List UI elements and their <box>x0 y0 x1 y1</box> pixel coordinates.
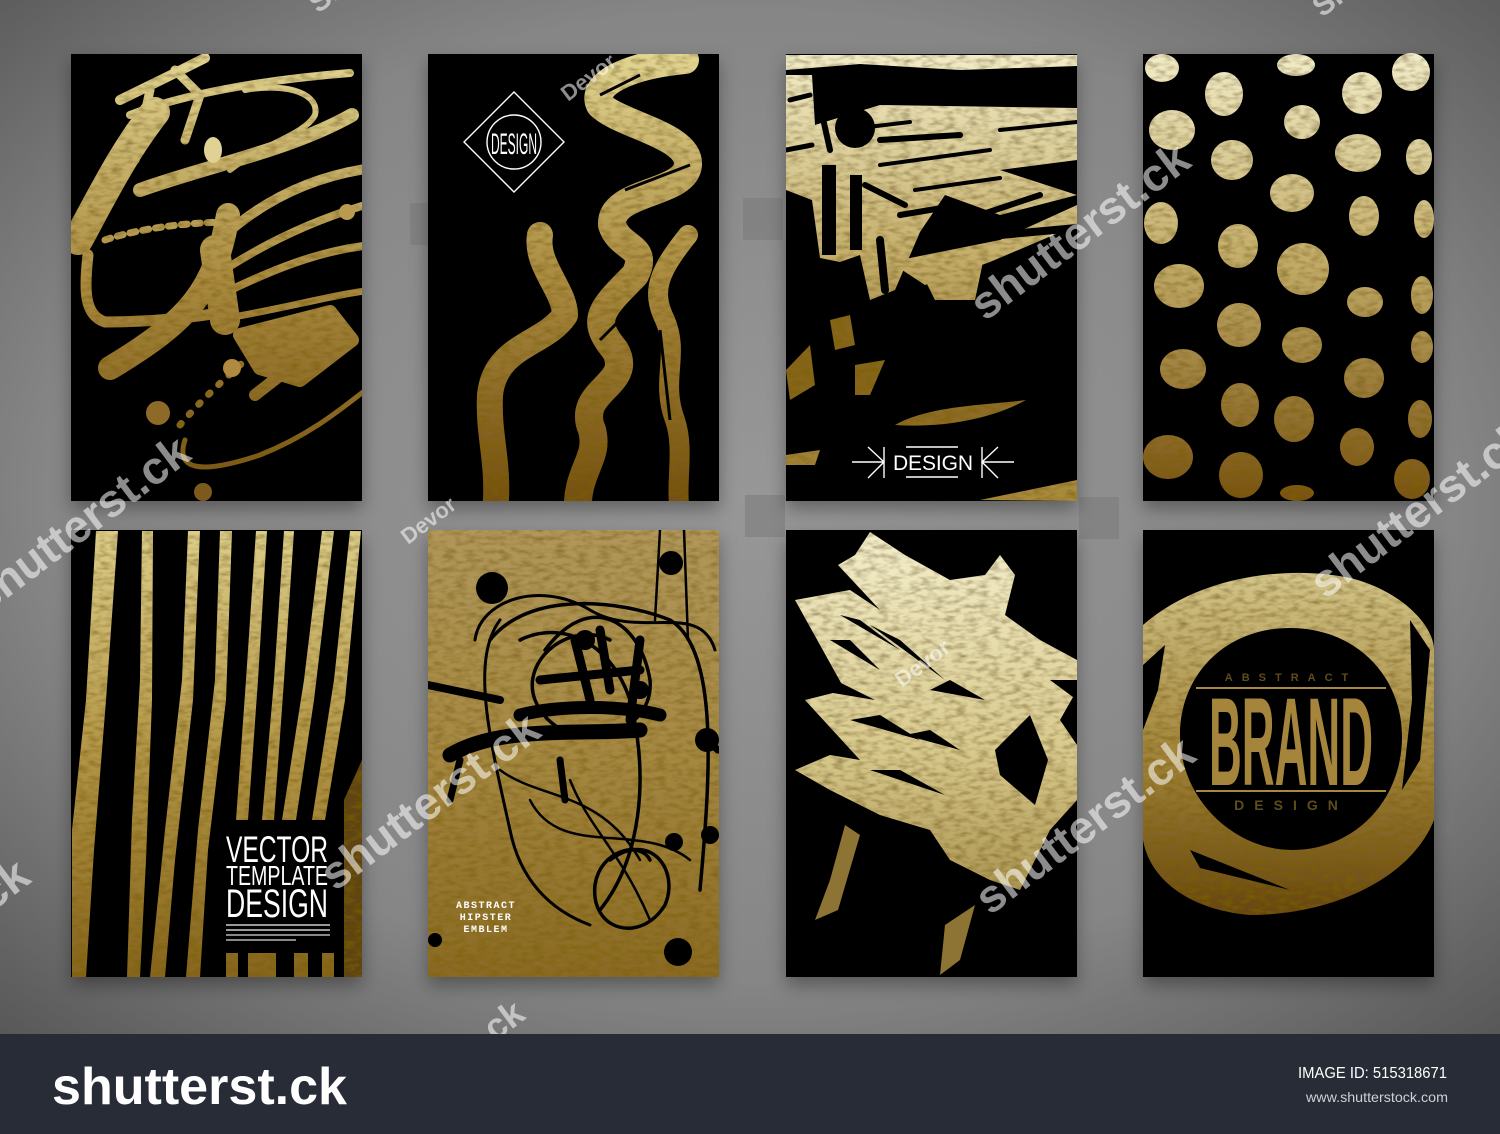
icon: design diamond emblem: DESIGN <box>491 128 537 161</box>
panel: card 6 gold with black scribble <box>428 530 719 977</box>
text block: vector template design <box>216 820 344 953</box>
watermarks: ck <box>475 991 533 1048</box>
watermarks: shutterst.ck <box>965 725 1205 924</box>
brand logotype: ABSTRACT <box>1225 672 1357 684</box>
watermarks: Devor <box>396 491 461 549</box>
ring gaps <box>1143 620 1430 890</box>
gold stripes <box>72 531 362 977</box>
text block: vector template design: TEMPLATE <box>226 860 328 891</box>
gold dot pattern <box>1143 53 1434 501</box>
design label <box>852 447 1014 478</box>
text block: vector template design: VECTOR <box>226 829 328 870</box>
panel: card 7 pale gold brush <box>786 530 1077 977</box>
panel: card 5 vertical stripes <box>71 530 362 977</box>
gold splatter strokes <box>78 58 372 467</box>
brand logotype <box>1196 672 1386 813</box>
text block: abstract hipster emblem: HIPSTER <box>460 913 512 924</box>
lower drips <box>815 825 975 975</box>
image id: IMAGE ID: 515318671 <box>1298 1065 1447 1082</box>
panel: card 8 gold ring and brand <box>1143 530 1434 977</box>
text block: abstract hipster emblem <box>456 901 516 936</box>
watermarks: shutterst.ck <box>310 701 550 900</box>
panel: card 3 horizontal brush <box>786 54 1077 501</box>
text block: abstract hipster emblem: EMBLEM <box>463 925 509 936</box>
gold ring <box>1143 573 1434 915</box>
black scribble <box>428 530 718 928</box>
panel: card 1 gold splatter <box>71 54 372 501</box>
black ink blots <box>428 551 719 966</box>
watermark tiles <box>410 198 1452 834</box>
footer logo: shutterst.ck <box>52 1058 347 1116</box>
black brush gaps <box>815 615 1077 805</box>
watermarks: Devor <box>556 48 621 106</box>
website: www.shutterstock.com <box>1305 1089 1448 1105</box>
watermarks: shutterst.ck <box>960 131 1200 330</box>
text block: abstract hipster emblem: ABSTRACT <box>456 901 516 912</box>
panel: card 4 gold dots <box>1143 53 1434 501</box>
brush blob <box>795 532 1077 890</box>
gold dots <box>146 137 355 501</box>
wavy gold strokes <box>490 60 690 515</box>
text block: vector template design: DESIGN <box>226 882 328 926</box>
icon: design diamond emblem <box>464 92 564 192</box>
footer bar <box>0 1034 1500 1134</box>
watermarks: Devor <box>890 634 955 692</box>
brand logotype: DESIGN <box>1234 797 1348 813</box>
design label: DESIGN <box>893 452 973 475</box>
brushed gold shapes <box>786 55 1077 501</box>
panel: card 2 wavy brush strokes <box>428 54 719 515</box>
